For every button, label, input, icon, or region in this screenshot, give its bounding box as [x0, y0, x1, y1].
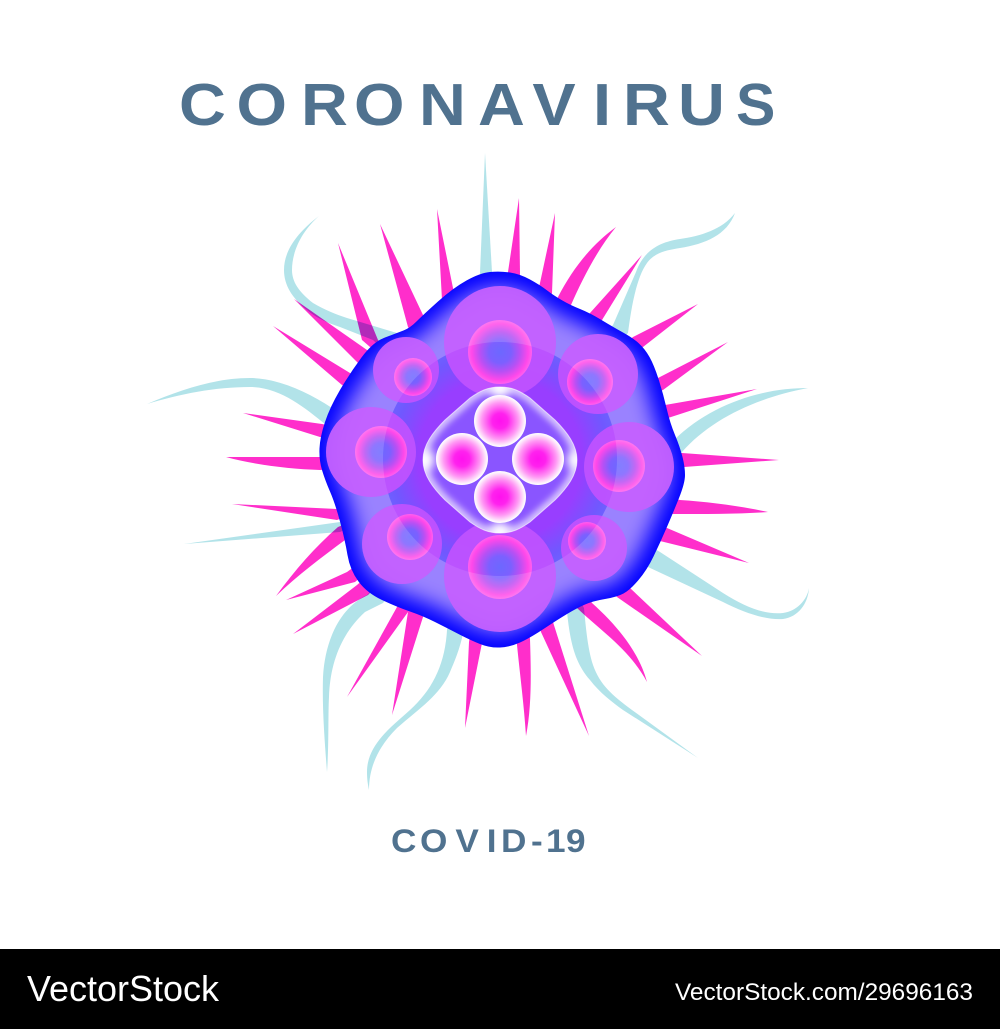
title: S [736, 72, 775, 138]
black band [0, 949, 1000, 1029]
title: CORONAVIRU [179, 73, 725, 138]
inner core circle [383, 342, 617, 576]
subtitle: COVID-19 [391, 824, 586, 860]
magenta spikes [226, 198, 779, 736]
cell nuclei [355, 320, 645, 599]
pale blue tendrils [147, 153, 809, 790]
virus body [319, 272, 685, 648]
membrane inner glow [334, 287, 670, 633]
watermark logo: VectorStock [27, 968, 220, 1009]
image id: VectorStock.com/29696163 [675, 979, 973, 1006]
central diamond capsule [422, 386, 578, 534]
virus illustration [147, 153, 809, 790]
blue membrane [319, 272, 685, 648]
large translucent cells [326, 286, 674, 632]
four central spheres [436, 395, 564, 523]
lighter overlay outside core ring [326, 286, 674, 632]
footer bar [0, 949, 1000, 1029]
